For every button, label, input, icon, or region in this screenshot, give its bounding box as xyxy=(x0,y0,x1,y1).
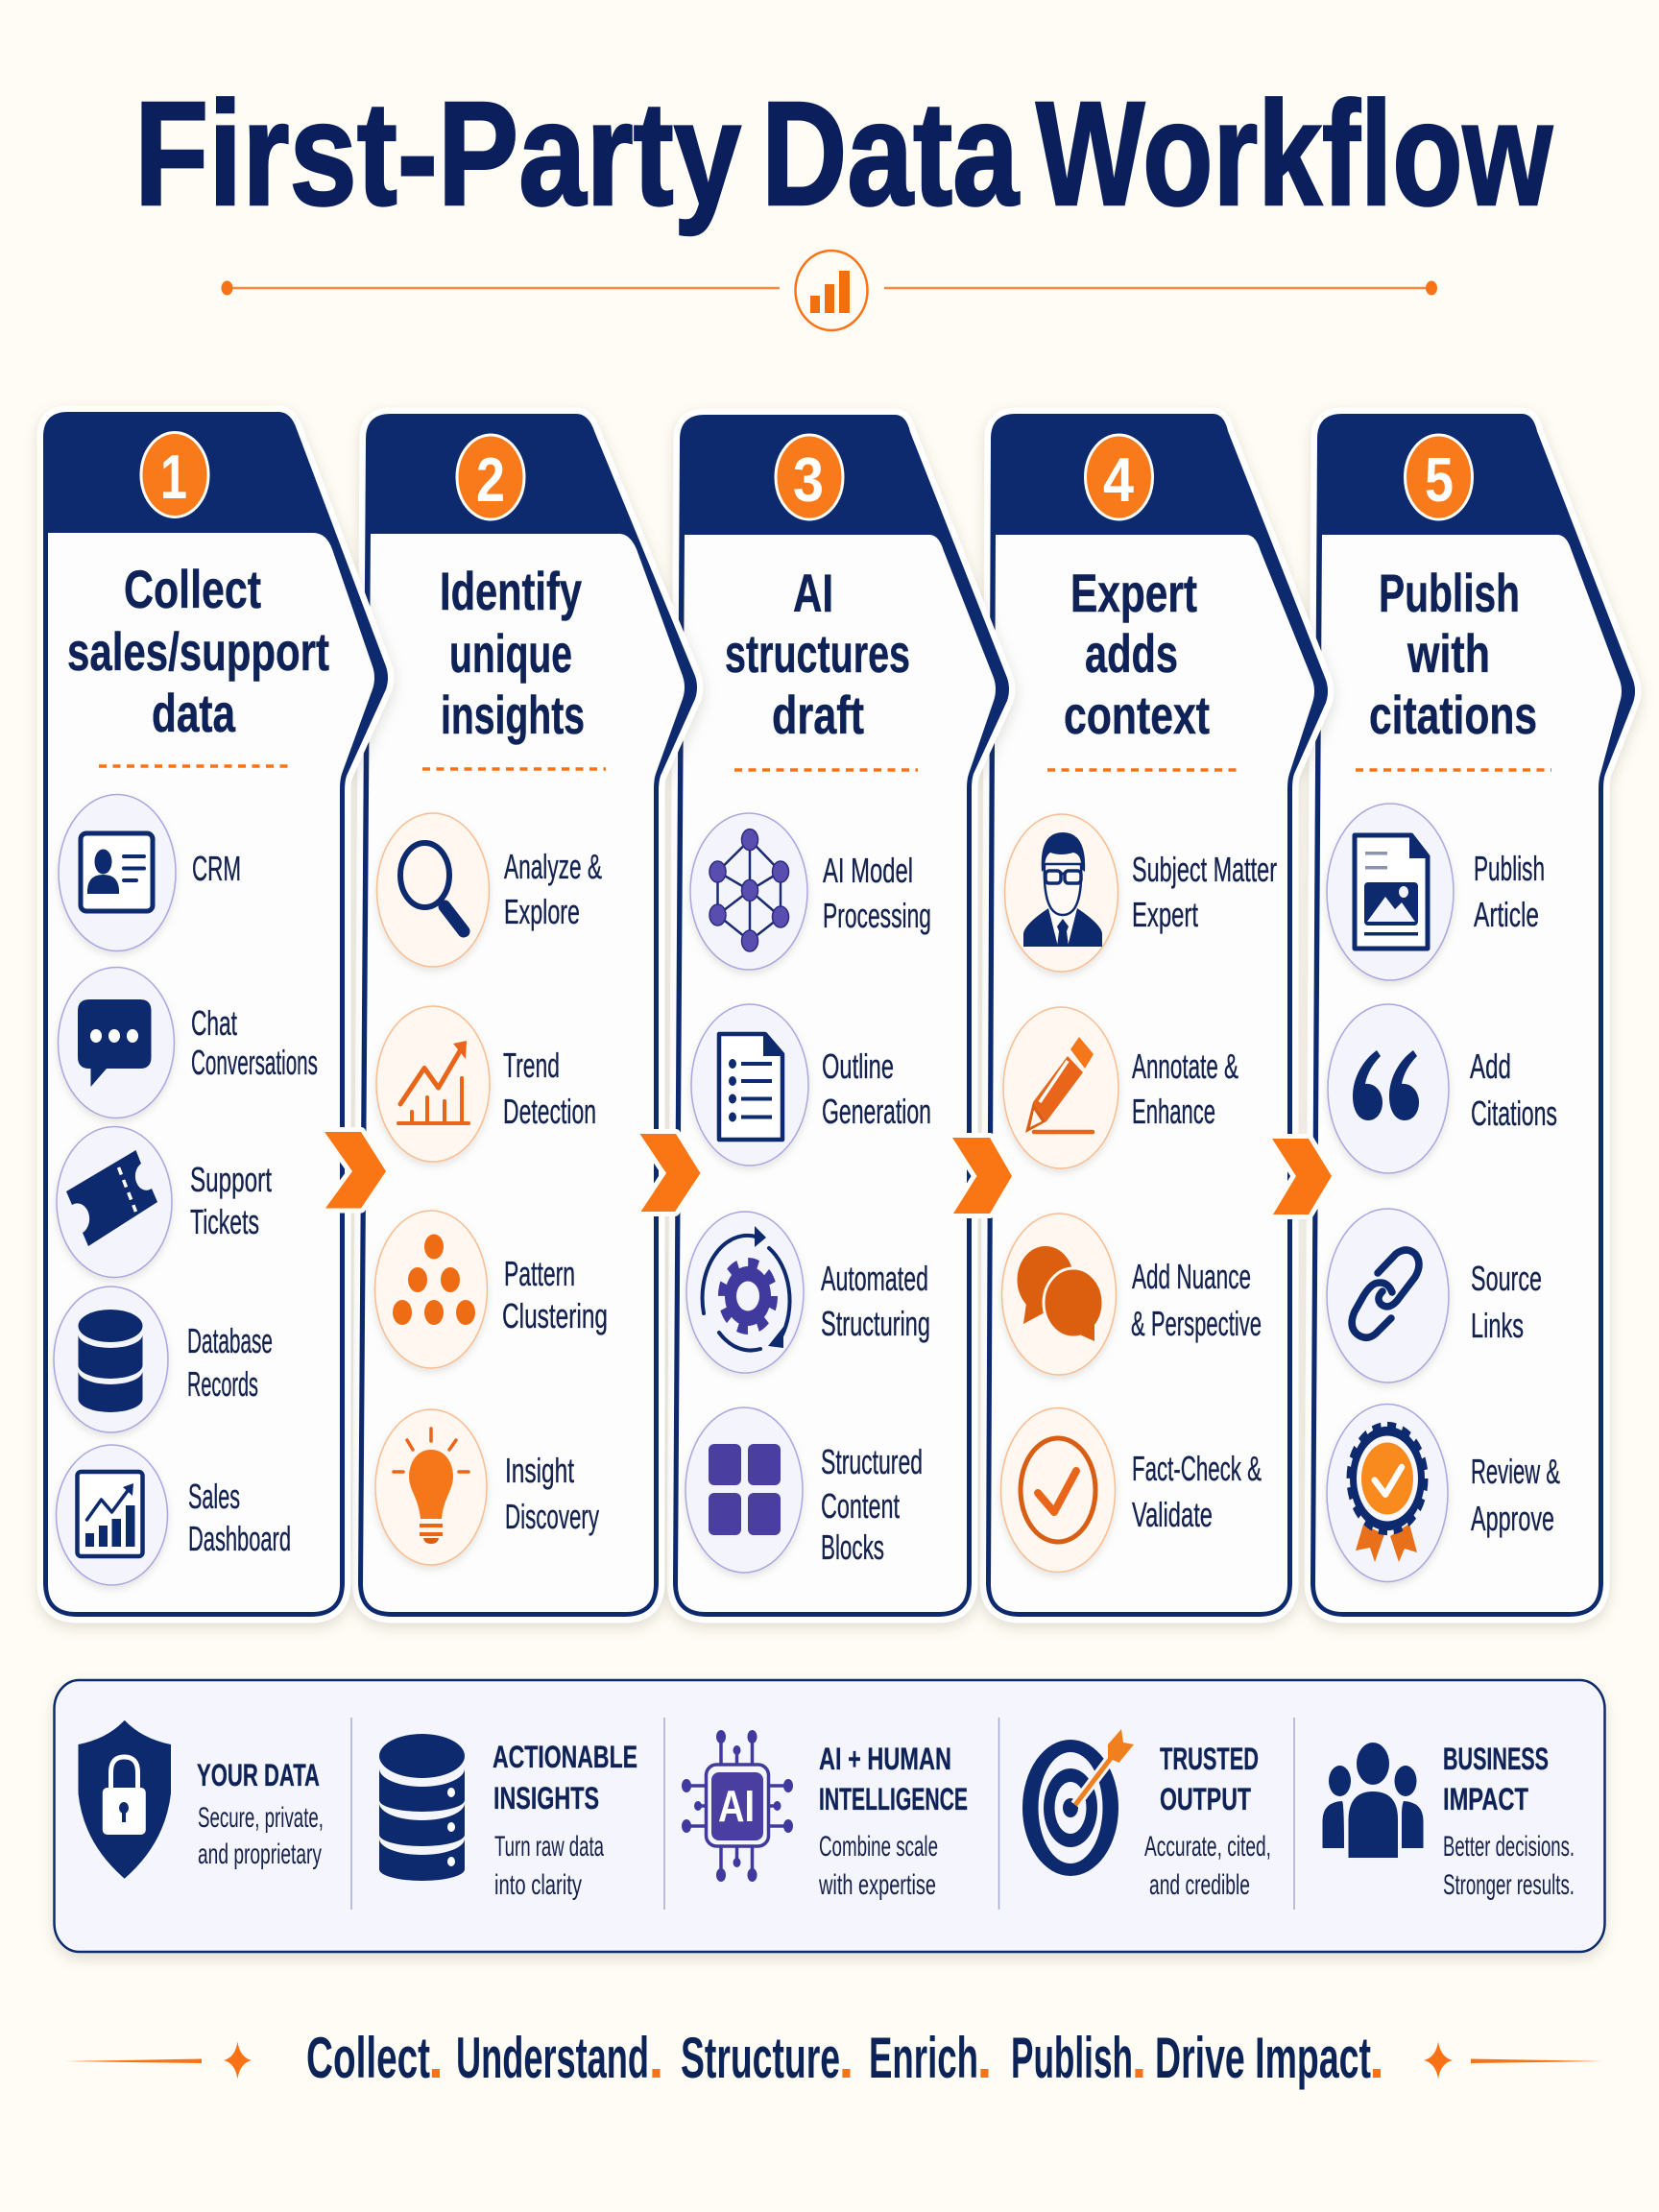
title xyxy=(134,71,1553,236)
arrow: step 3 to 4 xyxy=(952,1138,1012,1214)
summary: your data xyxy=(79,1720,324,1879)
item: database records xyxy=(54,1286,273,1432)
item: add nuance and perspective: & Perspective xyxy=(1131,1304,1262,1343)
item: fact-check and validate: Fact-Check & xyxy=(1132,1449,1262,1488)
summary: AI plus human intelligence: Combine scale xyxy=(819,1831,938,1863)
step number 5: 5 xyxy=(1425,445,1454,515)
summary: trusted output xyxy=(1022,1729,1271,1901)
item: AI model processing: AI Model xyxy=(823,851,913,890)
step number 3 xyxy=(776,435,843,519)
summary: your data: Secure, private, xyxy=(198,1802,324,1834)
item: insight discovery: Discovery xyxy=(505,1497,599,1536)
heading: publish with citations: citations xyxy=(1369,685,1537,745)
item: pattern clustering: Pattern xyxy=(504,1254,575,1293)
item: subject matter expert: Expert xyxy=(1132,895,1198,934)
item: subject matter expert: Subject Matter xyxy=(1132,850,1277,889)
item: fact-check and validate xyxy=(1000,1407,1262,1573)
arrow: step 4 to 5 xyxy=(1272,1139,1332,1214)
summary: trusted output: Accurate, cited, xyxy=(1144,1831,1271,1863)
footer tagline xyxy=(65,2026,1603,2090)
heading: AI structures draft: AI xyxy=(793,563,833,623)
item: sales dashboard xyxy=(56,1445,291,1585)
heading: expert adds context xyxy=(1047,563,1239,770)
heading: identify unique insights: unique xyxy=(449,623,572,684)
item: add nuance and perspective xyxy=(1002,1214,1262,1375)
heading: collect sales/support data: Collect xyxy=(124,559,261,619)
item: structured content blocks: Structured xyxy=(821,1442,923,1481)
heading: identify unique insights xyxy=(422,561,606,769)
item: database records: Database xyxy=(187,1321,273,1360)
item: sales dashboard: Sales xyxy=(188,1477,240,1516)
panel: step 5 publish with citations xyxy=(1310,414,1635,1617)
heading: publish with citations: Publish xyxy=(1379,563,1520,623)
step number 4: 4 xyxy=(1103,445,1134,515)
footer tagline: Enrich xyxy=(869,2026,978,2090)
step number 3: 3 xyxy=(793,445,824,515)
item: publish article: Publish xyxy=(1474,849,1545,888)
icon: shield with lock xyxy=(79,1720,171,1879)
item: database records: Records xyxy=(187,1364,258,1404)
summary: your data: YOUR DATA xyxy=(197,1758,320,1792)
heading: AI structures draft xyxy=(725,563,918,770)
summary: actionable insights: into clarity xyxy=(494,1869,582,1901)
footer tagline: Structure xyxy=(681,2026,840,2090)
item: add citations xyxy=(1328,1004,1557,1173)
summary: your data: and proprietary xyxy=(198,1839,322,1870)
summary: business impact xyxy=(1323,1742,1575,1901)
summary: trusted output: TRUSTED xyxy=(1160,1742,1259,1776)
title: Data xyxy=(761,71,1020,236)
summary: actionable insights: Turn raw data xyxy=(494,1831,604,1863)
title: First-Party xyxy=(134,71,741,236)
arrow: step 1 to 2 xyxy=(325,1132,386,1208)
item: support tickets: Tickets xyxy=(190,1202,259,1241)
item: subject matter expert xyxy=(1004,814,1277,972)
item: add citations: Add xyxy=(1470,1046,1511,1086)
summary: business impact: IMPACT xyxy=(1443,1782,1528,1816)
item: insight discovery: Insight xyxy=(505,1451,574,1490)
item: add citations: Citations xyxy=(1471,1094,1557,1133)
footer tagline: . xyxy=(428,2026,444,2090)
footer tagline: Understand xyxy=(456,2026,649,2090)
footer tagline: . xyxy=(977,2026,993,2090)
item: CRM: CRM xyxy=(192,849,241,888)
item: annotate and enhance xyxy=(1003,1007,1238,1168)
footer tagline: . xyxy=(1131,2026,1146,2090)
heading: collect sales/support data: sales/support xyxy=(67,621,329,682)
item: chat conversations: Chat xyxy=(191,1003,237,1043)
item: annotate and enhance: Enhance xyxy=(1132,1092,1215,1131)
item: review and approve: Approve xyxy=(1471,1499,1554,1538)
item: source links: Links xyxy=(1471,1306,1524,1345)
icon: AI chip: AI xyxy=(718,1781,755,1831)
item: CRM xyxy=(59,795,241,950)
item: automated structuring: Automated xyxy=(821,1259,928,1298)
item: automated structuring xyxy=(686,1212,930,1373)
item: structured content blocks xyxy=(685,1407,923,1573)
footer tagline: . xyxy=(649,2026,664,2090)
item: trend detection: Detection xyxy=(503,1092,596,1131)
item: source links xyxy=(1327,1209,1542,1382)
item: outline generation: Outline xyxy=(822,1046,894,1086)
heading: expert adds context: Expert xyxy=(1070,563,1197,623)
heading: publish with citations: with xyxy=(1407,623,1490,684)
icon: target with arrow xyxy=(1022,1729,1134,1876)
summary: actionable insights: INSIGHTS xyxy=(493,1781,599,1815)
heading: AI structures draft: structures xyxy=(725,623,910,684)
item: annotate and enhance: Annotate & xyxy=(1132,1046,1238,1086)
item: structured content blocks: Content xyxy=(821,1486,900,1526)
panel: step 3 AI structures draft xyxy=(673,415,1009,1617)
item: chat conversations: Conversations xyxy=(191,1043,318,1082)
summary: actionable insights xyxy=(379,1734,637,1901)
item: support tickets xyxy=(57,1127,272,1277)
item: publish article xyxy=(1327,804,1545,980)
item: outline generation: Generation xyxy=(822,1092,931,1131)
item: analyze and explore: Analyze & xyxy=(504,847,602,886)
item: insight discovery xyxy=(375,1409,599,1565)
summary: trusted output: OUTPUT xyxy=(1160,1782,1251,1816)
step number 1 xyxy=(141,432,208,517)
heading: collect sales/support data xyxy=(67,559,329,766)
summary: AI plus human intelligence: with expertise xyxy=(818,1869,936,1901)
summary: trusted output: and credible xyxy=(1149,1869,1250,1901)
title divider with chart icon xyxy=(221,251,1437,330)
item: review and approve: Review & xyxy=(1471,1452,1560,1491)
summary: business impact: Better decisions. xyxy=(1443,1831,1575,1863)
icon: database xyxy=(379,1734,465,1881)
step number 5 xyxy=(1406,435,1473,519)
item: source links: Source xyxy=(1471,1259,1542,1298)
footer tagline: Collect xyxy=(306,2026,430,2090)
item: automated structuring: Structuring xyxy=(821,1304,930,1343)
footer tagline: Drive Impact xyxy=(1155,2026,1371,2090)
item: analyze and explore xyxy=(376,813,602,967)
item: pattern clustering: Clustering xyxy=(502,1296,608,1335)
step number 1: 1 xyxy=(160,442,187,512)
item: support tickets: Support xyxy=(190,1160,272,1199)
summary: business impact: Stronger results. xyxy=(1443,1869,1575,1901)
heading: identify unique insights: insights xyxy=(441,685,585,745)
item: review and approve xyxy=(1327,1404,1560,1582)
item: outline generation xyxy=(691,1004,931,1166)
footer tagline: Publish xyxy=(1011,2026,1133,2090)
item: publish article: Article xyxy=(1474,895,1539,934)
panel: step 1 collect sales/support data xyxy=(43,412,388,1617)
item: AI model processing xyxy=(690,813,931,970)
item: sales dashboard: Dashboard xyxy=(188,1519,291,1558)
summary: actionable insights: ACTIONABLE xyxy=(493,1740,637,1774)
item: structured content blocks: Blocks xyxy=(821,1527,884,1567)
arrow: step 2 to 3 xyxy=(639,1134,701,1212)
heading: identify unique insights: Identify xyxy=(440,561,582,621)
item: analyze and explore: Explore xyxy=(504,892,580,931)
icon: people group xyxy=(1323,1743,1423,1858)
icon: AI chip xyxy=(682,1730,793,1882)
heading: publish with citations xyxy=(1356,563,1551,770)
item: fact-check and validate: Validate xyxy=(1132,1495,1213,1534)
item: trend detection xyxy=(376,1006,596,1162)
summary: business impact: BUSINESS xyxy=(1443,1742,1549,1776)
footer tagline: . xyxy=(1369,2026,1384,2090)
panel: step 4 expert adds context xyxy=(986,414,1328,1617)
item: AI model processing: Processing xyxy=(823,896,931,935)
heading: AI structures draft: draft xyxy=(772,685,864,745)
summary band xyxy=(54,1680,1605,1952)
summary: AI plus human intelligence xyxy=(682,1730,968,1901)
heading: expert adds context: adds xyxy=(1085,623,1178,684)
panel: step 2 identify unique insights xyxy=(358,414,697,1617)
step number 4 xyxy=(1085,435,1152,519)
item: trend detection: Trend xyxy=(503,1046,560,1085)
summary: AI plus human intelligence: AI + HUMAN xyxy=(819,1742,951,1776)
heading: collect sales/support data: data xyxy=(152,683,236,743)
summary: AI plus human intelligence: INTELLIGENCE xyxy=(819,1782,968,1816)
item: pattern clustering xyxy=(374,1211,608,1368)
heading: expert adds context: context xyxy=(1064,685,1210,745)
item: chat conversations xyxy=(58,968,318,1118)
footer tagline: . xyxy=(839,2026,854,2090)
step number 2 xyxy=(457,435,524,519)
item: add nuance and perspective: Add Nuance xyxy=(1132,1257,1251,1296)
step number 2: 2 xyxy=(476,445,505,515)
